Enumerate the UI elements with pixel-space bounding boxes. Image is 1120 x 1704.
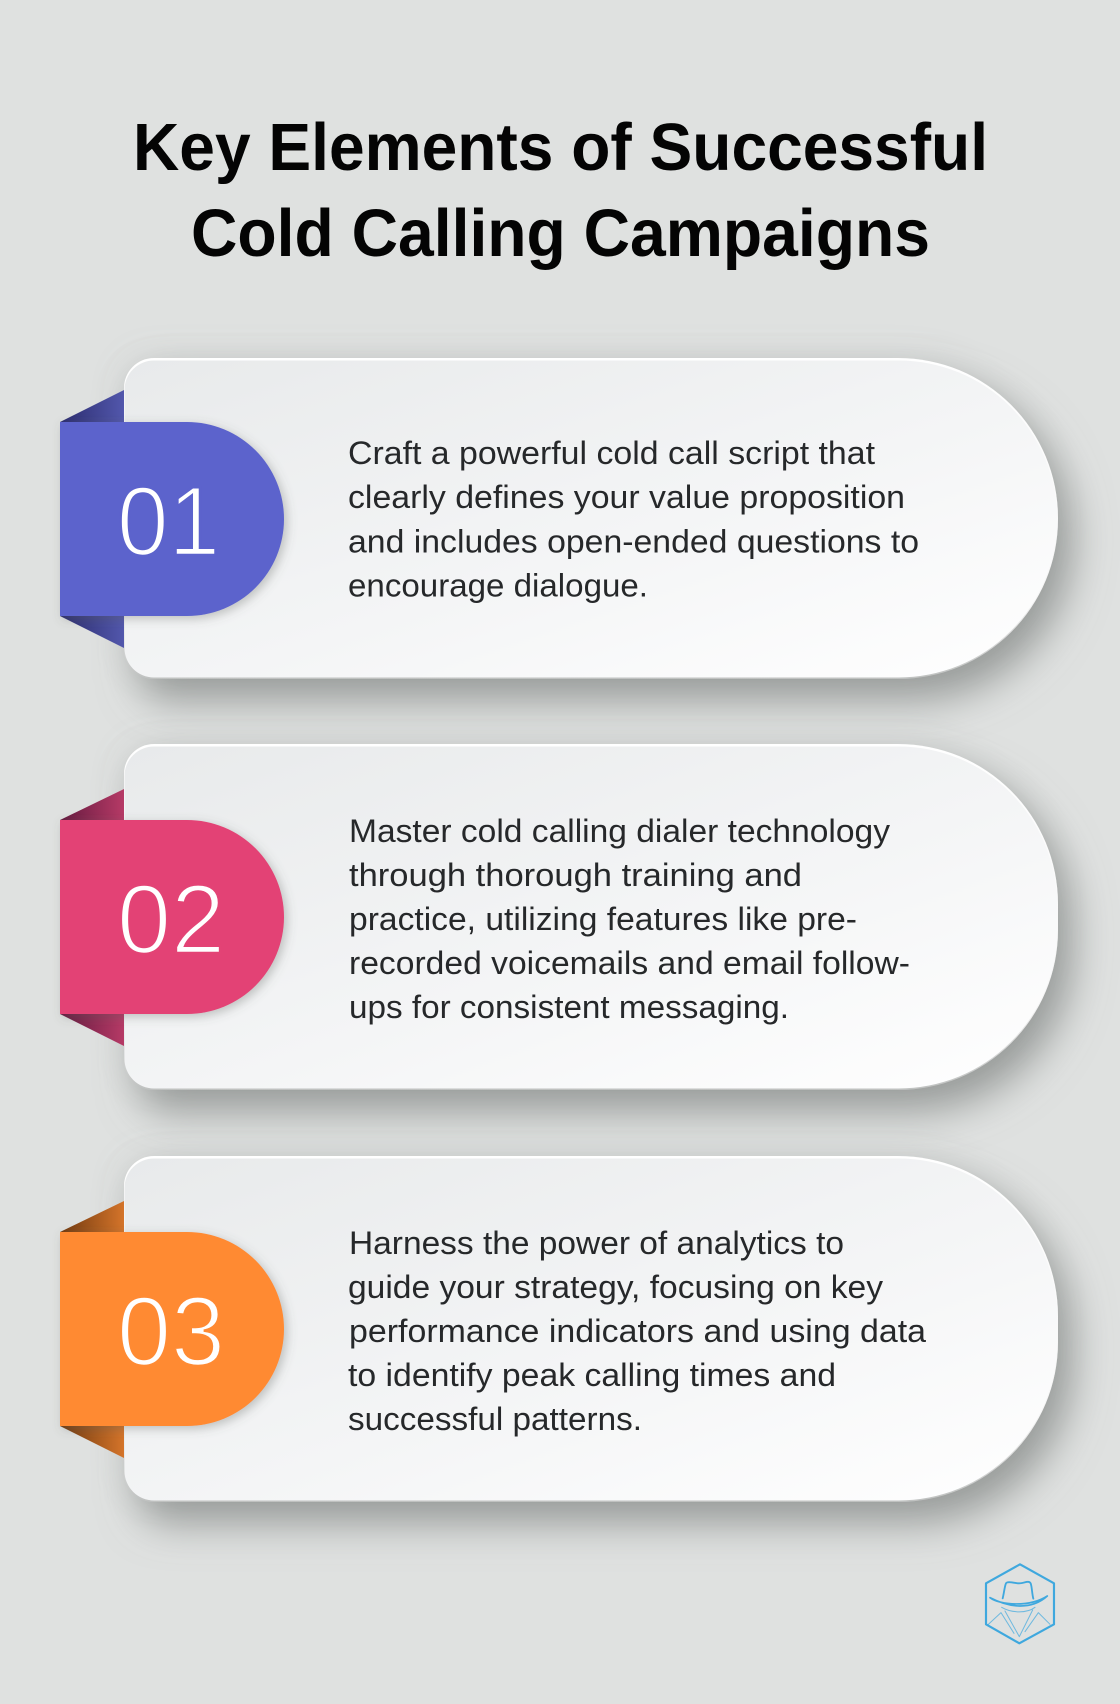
- text 02: ups for consistent messaging.: [349, 989, 789, 1025]
- text 01: [348, 435, 919, 604]
- ribbon folds 03: [60, 1201, 124, 1458]
- text 01: Craft a powerful cold call script that: [348, 435, 875, 471]
- ribbon folds 02: [60, 789, 124, 1046]
- text 02: [349, 813, 910, 1025]
- text 02: practice, utilizing features like pre-: [349, 901, 857, 937]
- panel: step 01: [60, 358, 1058, 679]
- number 02: 02: [117, 864, 225, 974]
- text 03: [348, 1225, 926, 1437]
- number 03: 03: [117, 1276, 225, 1386]
- title: [133, 110, 988, 271]
- badge 01: [60, 422, 284, 616]
- text 02: recorded voicemails and email follow-: [349, 945, 910, 981]
- card 02 background: [124, 744, 1058, 1090]
- text 03: to identify peak calling times and: [348, 1357, 836, 1393]
- text 03: Harness the power of analytics to: [349, 1225, 844, 1261]
- number 01: 01: [117, 466, 220, 576]
- text 01: clearly defines your value proposition: [348, 479, 905, 515]
- text 03: successful patterns.: [348, 1401, 642, 1437]
- text 02: through thorough training and: [349, 857, 802, 893]
- ribbon folds 01: [60, 390, 124, 648]
- card 01 background: [124, 358, 1058, 679]
- title: Cold Calling Campaigns: [191, 196, 930, 271]
- text 03: performance indicators and using data: [349, 1313, 926, 1349]
- card 03 background: [124, 1156, 1058, 1502]
- icon: hat logo: [986, 1564, 1054, 1643]
- text 02: Master cold calling dialer technology: [349, 813, 890, 849]
- panel: step 02: [60, 744, 1058, 1090]
- badge 03: [60, 1232, 284, 1426]
- title: Key Elements of Successful: [133, 110, 988, 185]
- text 01: and includes open-ended questions to: [348, 524, 919, 560]
- text 03: guide your strategy, focusing on key: [348, 1269, 883, 1305]
- badge 02: [60, 820, 284, 1014]
- text 01: encourage dialogue.: [348, 568, 648, 604]
- panel: step 03: [60, 1156, 1058, 1502]
